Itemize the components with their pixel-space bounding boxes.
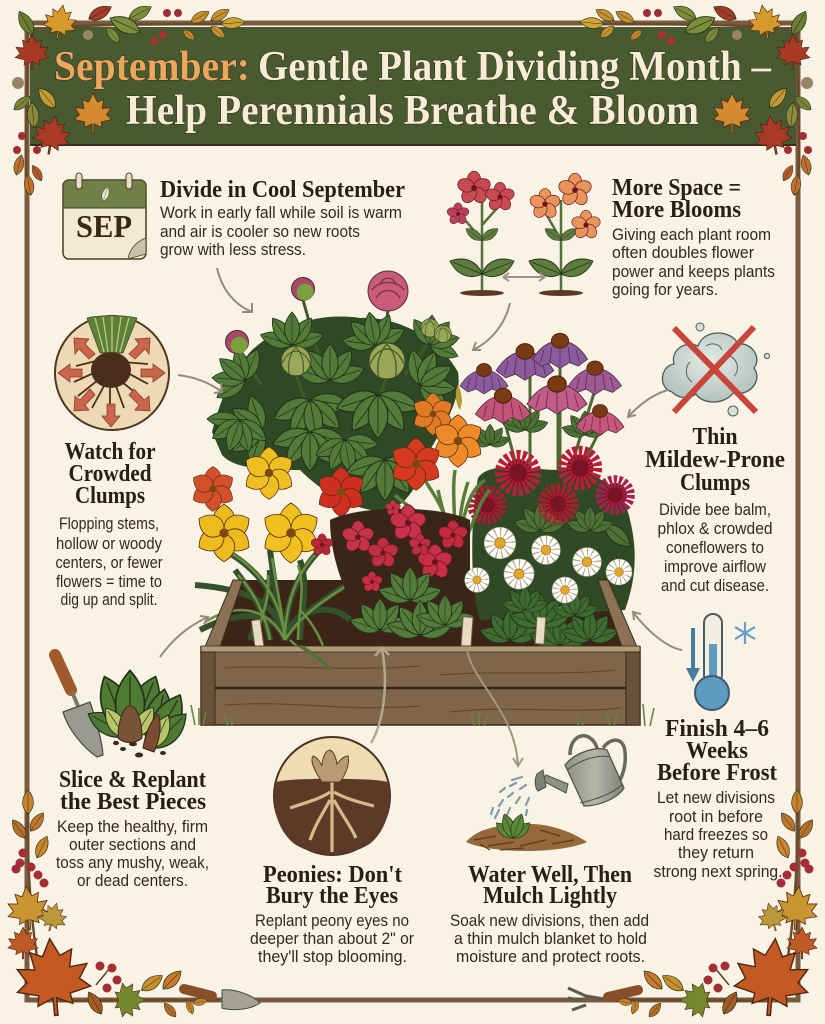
arrow: trowel to bed (160, 616, 208, 657)
heading: More Blooms (612, 196, 741, 223)
text block: a thin mulch blanket to hold (454, 929, 647, 948)
text block: Soak new divisions, then add (450, 911, 649, 930)
text block: often doubles flower (612, 243, 754, 262)
panel: finish before frost (654, 614, 782, 881)
text block: improve airflow (664, 557, 767, 576)
text block: toss any mushy, weak, (56, 853, 209, 872)
icon: calendar (63, 173, 146, 259)
text block: Keep the healthy, firm (57, 817, 208, 836)
coneflowers (460, 333, 624, 435)
arrow: calendar to peony (217, 268, 252, 312)
icon: peony eyes cross-section (274, 737, 390, 855)
icon: mildew cloud crossed out (662, 323, 770, 416)
title: September: (54, 44, 250, 90)
heading: Finish 4–6 (665, 715, 769, 742)
arrow: spacing to coneflowers (473, 303, 510, 350)
heading (657, 715, 778, 786)
heading (59, 766, 207, 815)
peony blooms and buds (225, 271, 451, 379)
text block: and air is cooler so new roots (160, 222, 360, 241)
heading: Thin (692, 423, 738, 450)
text block: outer sections and (69, 835, 196, 854)
text block (56, 817, 209, 890)
heading (468, 861, 632, 909)
garland top right (580, 2, 814, 196)
text block: dig up and split. (60, 590, 158, 609)
text block: Divide bee balm, (659, 500, 771, 519)
title (54, 44, 772, 134)
text block: Giving each plant room (612, 225, 771, 244)
text block: flowers = time to (56, 572, 162, 591)
heading: Bury the Eyes (266, 882, 398, 909)
garland top left (11, 2, 245, 196)
arrow: cloud to coneflowers (628, 390, 668, 417)
text block: coneflowers to (666, 538, 764, 557)
arrow: roots to garden (178, 375, 222, 393)
text block (56, 514, 163, 609)
text block: grow with less stress. (160, 240, 306, 259)
text block (612, 225, 775, 299)
panel: slice and replant (55, 655, 209, 890)
panel: thin mildew-prone clumps (645, 323, 785, 595)
arrow: peony eyes to bed (371, 648, 389, 743)
heading: Water Well, Then (468, 861, 632, 888)
text block: and cut disease. (661, 576, 769, 595)
text block: going for years. (612, 280, 718, 299)
title: Gentle Plant Dividing Month – (258, 44, 772, 90)
text block: Let new divisions (657, 788, 775, 807)
panel: watch for crowded clumps (55, 316, 169, 609)
phlox (310, 500, 470, 600)
grass tufts (191, 704, 654, 726)
text block (160, 203, 402, 259)
heading: the Best Pieces (60, 788, 206, 815)
text block: hollow or woody (56, 534, 162, 553)
center grass and orange lilies (388, 385, 490, 540)
icon: watering can and mulch (466, 736, 625, 851)
heading (64, 438, 156, 509)
wooden box (201, 580, 640, 725)
text block (250, 911, 414, 966)
icon: two spaced plants (446, 171, 602, 296)
heading: Mildew-Prone (645, 446, 785, 473)
heading: Weeks (686, 737, 748, 764)
panel: peonies (250, 737, 414, 966)
heading: Before Frost (657, 759, 778, 786)
heading: Clumps (75, 482, 145, 509)
heading (263, 861, 403, 909)
text block: root in before (669, 807, 763, 826)
low foliage (348, 567, 621, 652)
icon: trowel with divided plants (55, 655, 194, 758)
text block: Work in early fall while soil is warm (160, 203, 402, 222)
heading: Clumps (680, 469, 750, 496)
text block: hard freezes so (664, 825, 768, 844)
text block: strong next spring. (654, 862, 782, 881)
text block: power and keeps plants (612, 262, 775, 281)
text block: phlox & crowded (658, 519, 772, 538)
icon: banner maple leaf right (713, 93, 751, 133)
heading: Slice & Replant (59, 766, 207, 793)
garland bottom right (605, 790, 819, 1019)
heading: More Space = (612, 174, 741, 201)
garland bottom left (6, 790, 220, 1019)
icon: calendar: SEP (76, 208, 132, 244)
text block: Replant peony eyes no (255, 911, 409, 930)
title banner (30, 27, 796, 146)
heading: Watch for (64, 438, 156, 465)
text block: they return (678, 843, 754, 862)
text block: centers, or fewer (56, 553, 163, 572)
icon: root circle with arrows (55, 316, 169, 430)
daylily foliage and blooms (189, 447, 370, 672)
text block: Flopping stems, (59, 514, 159, 533)
peony bush (197, 300, 473, 512)
heading: Peonies: Don't (263, 861, 403, 888)
heading: Mulch Lightly (483, 882, 618, 909)
text block: deeper than about 2" or (250, 929, 414, 948)
icon: banner maple leaf left (74, 93, 112, 133)
daisies (464, 527, 632, 603)
coneflower and bee balm stems (469, 360, 635, 620)
text block (450, 911, 649, 966)
arrow: bed to watering (467, 648, 523, 766)
text block (658, 500, 772, 595)
arrow: thermometer to bed (633, 612, 682, 650)
heading: Divide in Cool September (160, 176, 405, 203)
bee balm (473, 452, 629, 519)
text block: they'll stop blooming. (258, 947, 407, 966)
title: Help Perennials Breathe & Bloom (126, 88, 699, 134)
text block (654, 788, 782, 881)
text block: moisture and protect roots. (456, 947, 645, 966)
heading (645, 423, 785, 496)
plant labels (251, 617, 546, 647)
soil (205, 580, 637, 650)
panel: divide in cool september (63, 173, 405, 259)
icon: thermometer and snowflake (686, 614, 755, 710)
text block: or dead centers. (77, 871, 188, 890)
icon: bottom trowel (184, 989, 260, 1010)
heading (612, 174, 741, 223)
icon: bottom fork (568, 988, 638, 1010)
panel: more space more blooms (446, 171, 775, 299)
panel: water and mulch (450, 736, 649, 966)
raised garden bed illustration (189, 271, 654, 726)
heading: Crowded (68, 460, 152, 487)
